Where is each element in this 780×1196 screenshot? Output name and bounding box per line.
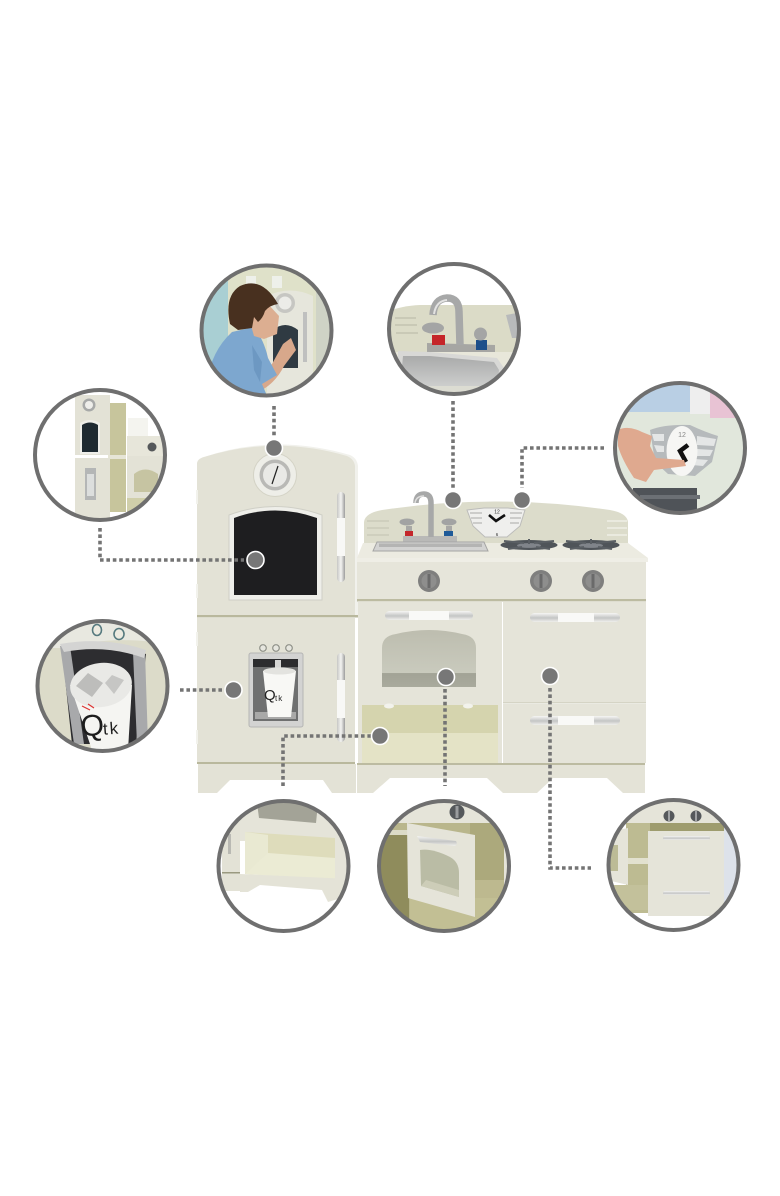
cup label: Q — [80, 709, 105, 743]
door handle — [530, 613, 620, 622]
cup label — [82, 714, 118, 741]
burners — [500, 539, 620, 550]
callout: fridge doors open — [33, 388, 167, 522]
leader: oven door — [443, 689, 447, 786]
marker: dispenser — [225, 682, 242, 698]
wall clock: 6 — [496, 532, 499, 537]
callout: open oven door — [377, 799, 511, 933]
callout: sink and faucet — [387, 262, 522, 396]
leader: sink — [451, 401, 455, 488]
backsplash — [364, 502, 628, 543]
toy kitchen illustration — [196, 444, 648, 793]
faucet and taps — [400, 494, 457, 543]
drawer handle — [530, 716, 620, 725]
stove knobs — [418, 570, 604, 592]
callout: open shelf — [217, 799, 351, 933]
leader: fridge doors — [100, 528, 244, 560]
marker: oven — [438, 668, 454, 686]
marker: cabinet — [542, 668, 558, 684]
lower drawer — [503, 704, 646, 763]
stove base — [357, 763, 645, 793]
marker: shelf — [372, 728, 388, 744]
fridge lower door — [196, 618, 355, 764]
leader: clock — [522, 448, 604, 488]
control panel — [357, 562, 646, 602]
water dispenser with cup: tk — [275, 694, 283, 703]
leader: cabinet door — [550, 688, 591, 868]
leader: boy chalkboard — [272, 406, 276, 436]
leader lines — [100, 401, 604, 868]
fridge lower handle — [337, 653, 345, 742]
callout: hand setting clock — [613, 382, 747, 516]
thermometer gauge — [254, 454, 296, 496]
marker: chalkboard top — [266, 440, 282, 456]
dispenser buttons — [260, 645, 292, 651]
marker dots — [225, 440, 558, 744]
callout: open cabinet door — [607, 798, 741, 932]
right cabinet door — [503, 602, 646, 704]
countertop — [357, 543, 648, 562]
stove unit — [357, 494, 648, 793]
leader: open shelf — [283, 736, 371, 787]
wall clock — [467, 508, 525, 537]
chalkboard — [229, 506, 322, 600]
oven handle — [385, 611, 473, 620]
leader: water dispenser — [180, 688, 222, 692]
backsplash slots — [367, 520, 627, 536]
marker: sink — [444, 492, 462, 508]
marker: clock — [514, 492, 530, 508]
callout: boy drawing on chalkboard — [200, 264, 334, 398]
water dispenser with cup — [249, 653, 303, 727]
fridge base — [198, 764, 356, 793]
fridge upper handle — [337, 492, 345, 582]
oven door — [358, 602, 502, 705]
marker: chalkboard — [247, 552, 264, 568]
refrigerator unit — [196, 444, 358, 793]
sink — [373, 542, 488, 551]
open shelf — [358, 704, 502, 763]
cup lettering: Q — [264, 687, 276, 704]
clock face numerals: 12 — [678, 432, 686, 439]
oven window — [382, 630, 476, 687]
callout: cup in water dispenser — [36, 619, 170, 753]
clock numerals: 12 — [494, 510, 500, 516]
cup label: tk — [102, 719, 121, 739]
fridge upper door — [196, 444, 358, 618]
